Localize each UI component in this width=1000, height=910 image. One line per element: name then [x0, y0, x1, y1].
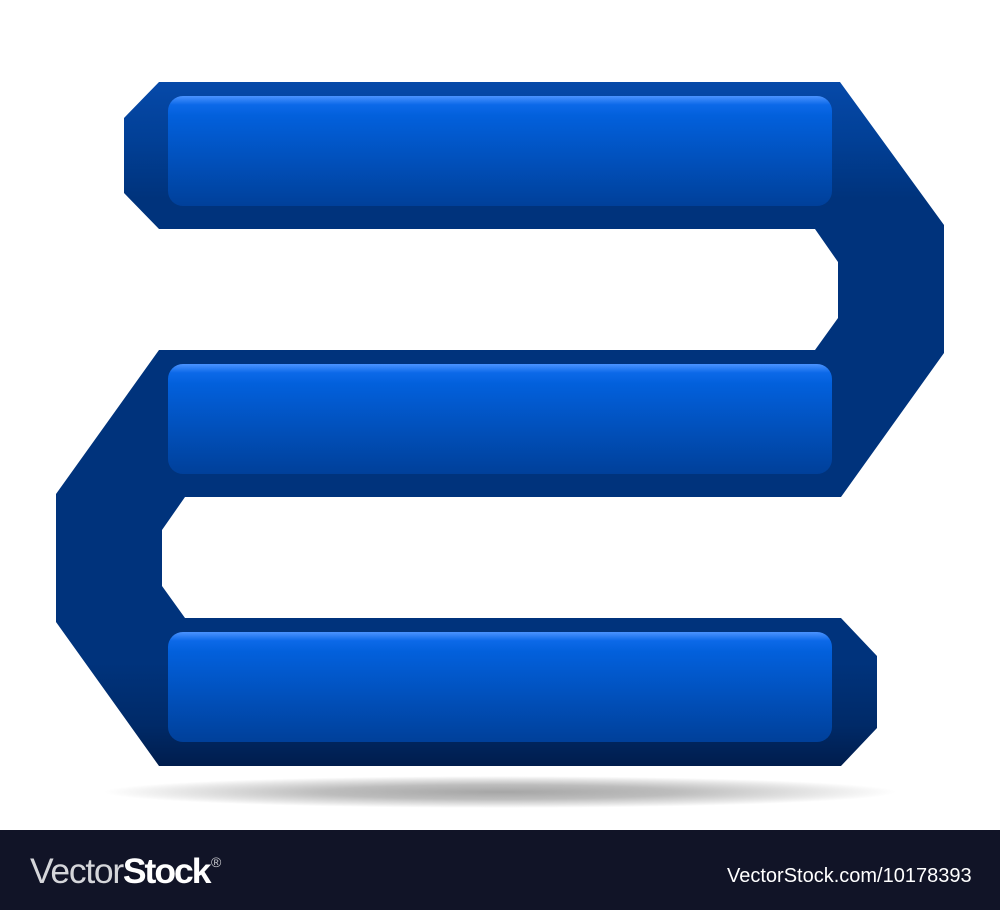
- footer logo: VectorStock: [30, 851, 210, 891]
- footer bar: [0, 830, 1000, 910]
- footer logo: ®: [211, 854, 221, 870]
- bottom panel: [168, 632, 832, 742]
- middle panel: [168, 364, 832, 474]
- top panel: [168, 96, 832, 206]
- footer image id: VectorStock.com/10178393: [727, 865, 972, 887]
- ground shadow: [104, 776, 896, 808]
- ribbon body: [56, 82, 944, 766]
